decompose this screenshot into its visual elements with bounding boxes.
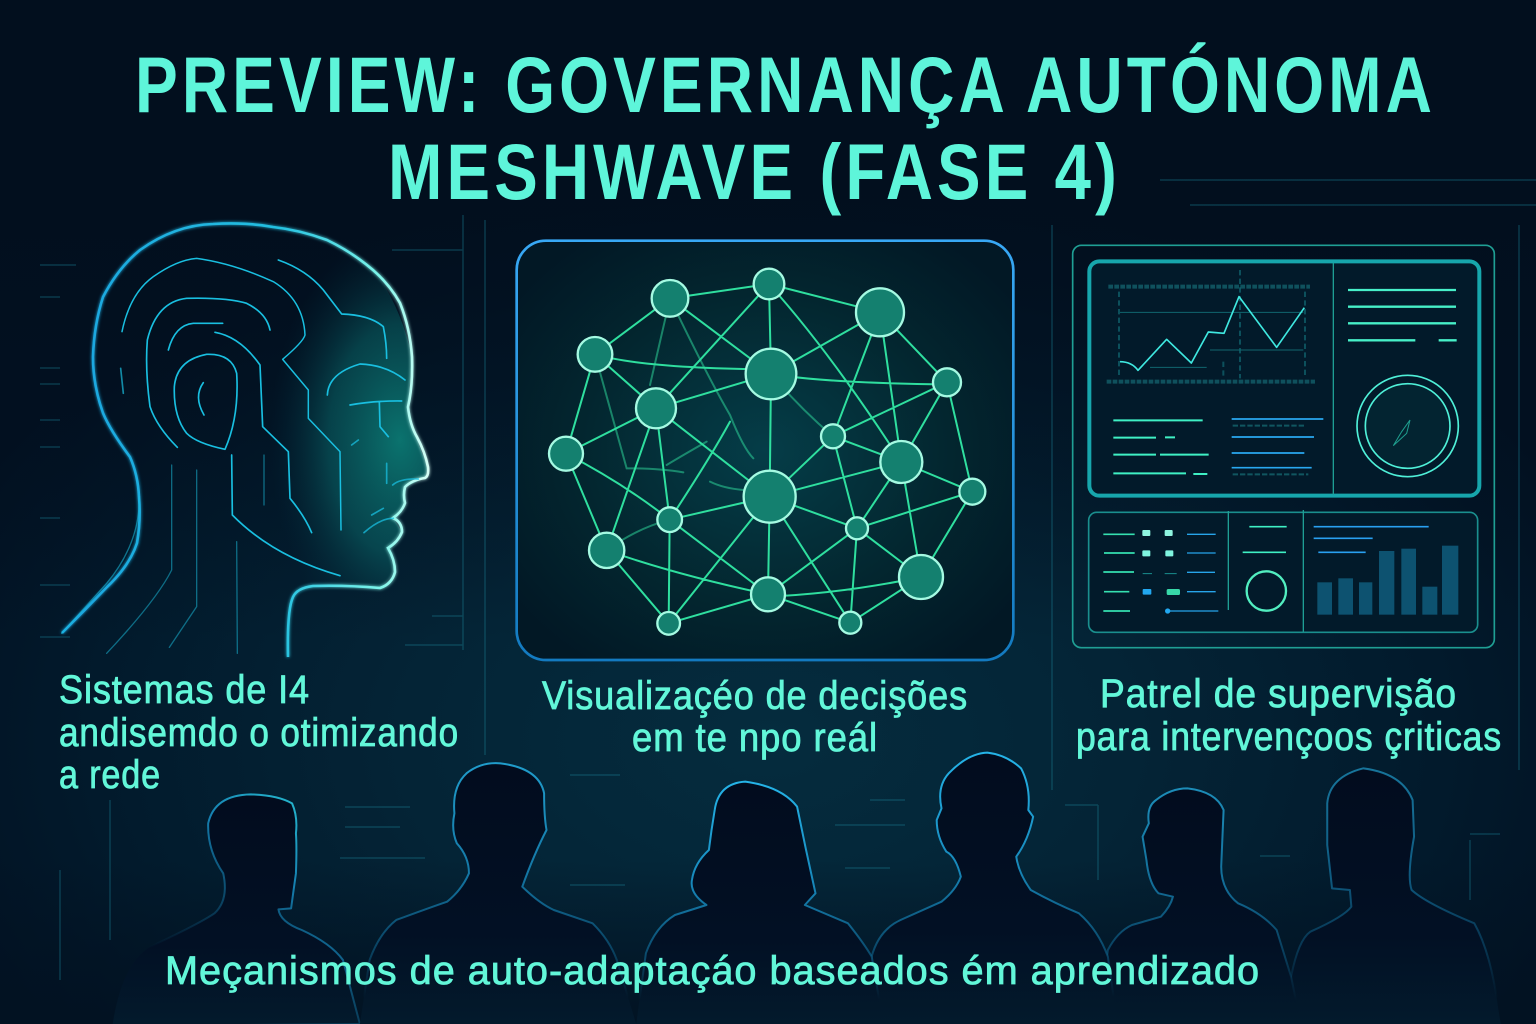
line chart: [1107, 270, 1315, 382]
dashboard outer frame: [1073, 245, 1494, 648]
network panel frame: [517, 241, 1013, 660]
status ring: [1247, 571, 1286, 611]
title line 2: MESHWAVE (FASE 4): [388, 127, 1121, 216]
bar chart: [1314, 527, 1458, 615]
caption: real-time decisions: em te npo reál: [632, 716, 878, 760]
network nodes: [549, 269, 985, 635]
circuit lines inside head: [62, 258, 418, 653]
gauge: [1357, 375, 1458, 477]
audience silhouettes: [113, 753, 1501, 1024]
network edges: [566, 284, 972, 623]
caption: AI systems: a rede: [59, 753, 161, 797]
dashboard bottom panel: [1089, 510, 1478, 632]
panel: decision network visualization: [517, 241, 1013, 660]
caption: real-time decisions: [542, 674, 968, 760]
list lines, green: [1113, 420, 1209, 474]
caption: supervision panel: [1076, 672, 1502, 759]
person 6: [1281, 768, 1501, 1024]
person 3: [636, 782, 883, 1024]
caption: AI systems: Sistemas de I4: [59, 668, 310, 712]
head outline: [62, 223, 428, 657]
dashboard top panel: [1089, 261, 1479, 496]
small status lines: [1243, 527, 1287, 552]
person 2: [360, 763, 636, 1024]
title: [135, 40, 1436, 216]
person 4: [862, 753, 1118, 1024]
person 5: [1098, 788, 1301, 1024]
panel: supervision dashboard: [1073, 245, 1494, 648]
caption: real-time decisions: Visualizaçéo de decişões: [542, 674, 968, 718]
caption: supervision panel: Patrel de supervişão: [1100, 672, 1457, 716]
caption: self-adaptation mechanisms: Meçanismos de auto-adaptaçáo baseados ém aprendizado: [165, 949, 1260, 993]
caption: AI systems: andisemdo o otimizando: [59, 711, 459, 755]
face glow: [290, 268, 427, 586]
caption: AI systems: [59, 668, 459, 797]
icon: AI head profile: [62, 220, 435, 657]
list lines, blue: [1232, 419, 1323, 474]
control rows: [1103, 530, 1218, 614]
text lines, right: [1348, 290, 1457, 340]
person 1: [113, 794, 360, 1024]
